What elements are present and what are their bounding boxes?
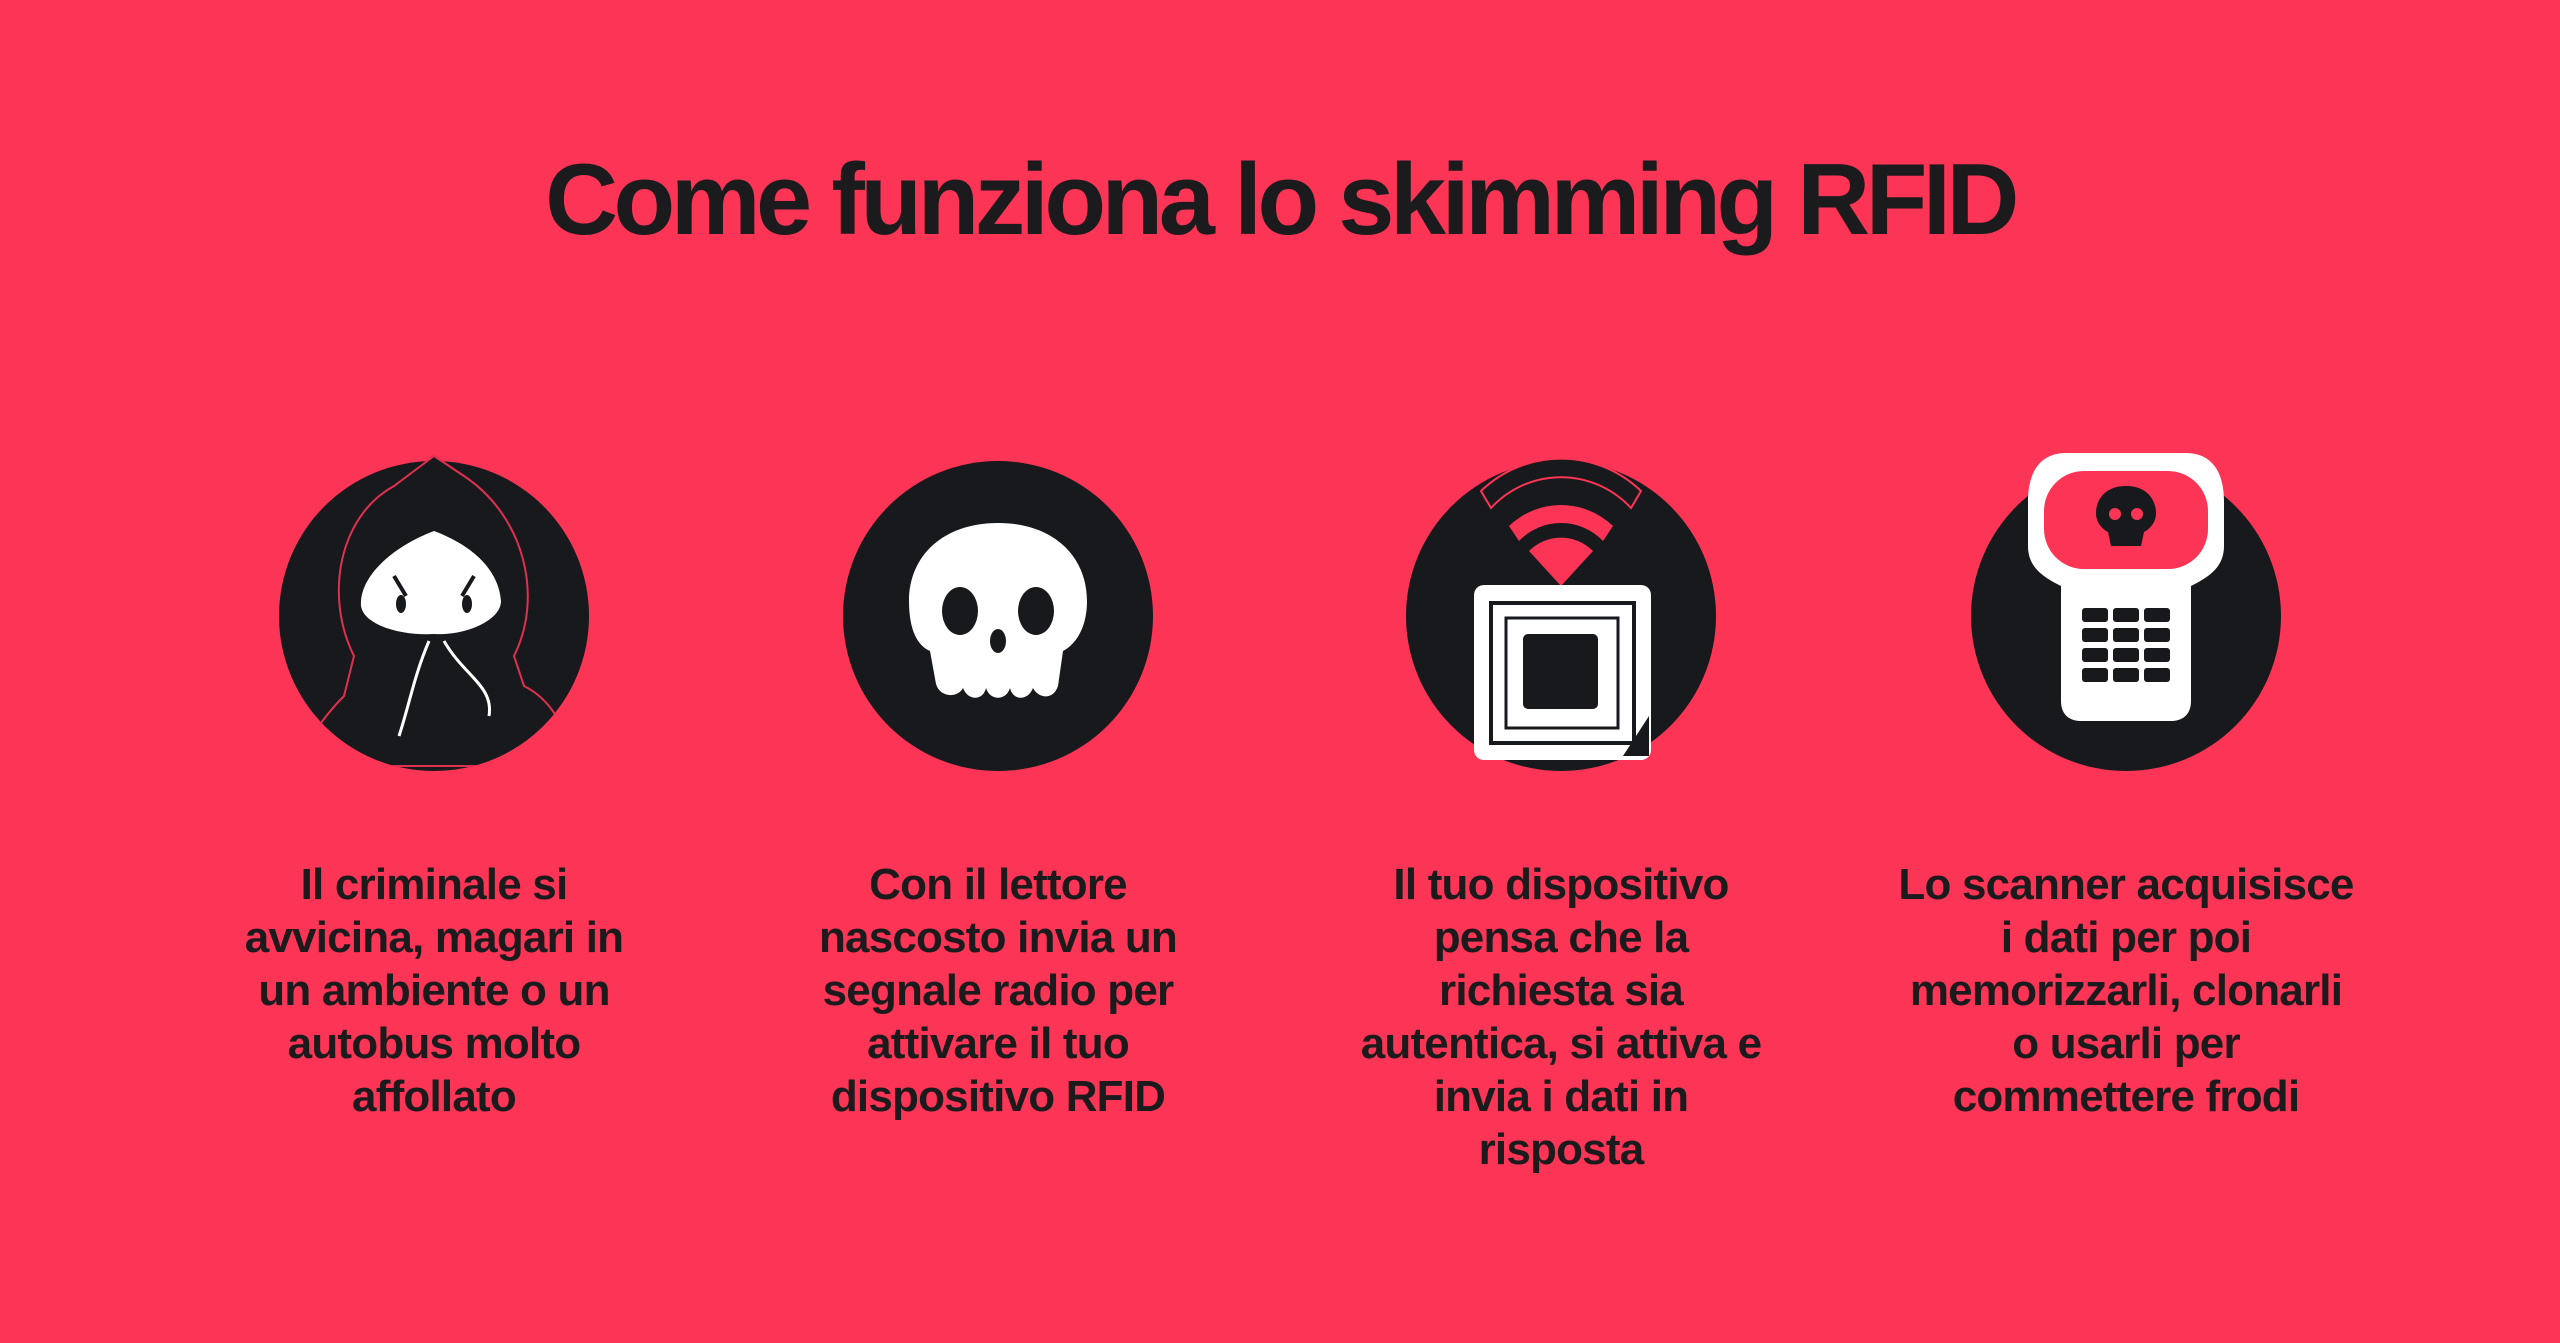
text: step 4: o usarli per xyxy=(2012,1019,2240,1068)
text: step 3: invia i dati in xyxy=(1434,1072,1688,1121)
text: step 1: affollato xyxy=(352,1072,516,1121)
text: step 4: Lo scanner acquisisce xyxy=(1898,860,2354,909)
text: step 1: autobus molto xyxy=(288,1019,580,1068)
text: step 2 xyxy=(819,860,1177,1121)
icon: hooded criminal xyxy=(279,456,589,771)
text: step 3: risposta xyxy=(1479,1125,1643,1174)
text: step 4: commettere frodi xyxy=(1953,1072,2299,1121)
text: step 3: autentica, si attiva e xyxy=(1361,1019,1761,1068)
text: step 4: memorizzarli, clonarli xyxy=(1910,966,2342,1015)
text: step 2: nascosto invia un xyxy=(819,913,1177,962)
text: step 4: i dati per poi xyxy=(2001,913,2251,962)
text: step 2: dispositivo RFID xyxy=(831,1072,1165,1121)
text: step 3: Il tuo dispositivo xyxy=(1393,860,1729,909)
text: step 2: Con il lettore xyxy=(869,860,1127,909)
text: step 1: un ambiente o un xyxy=(258,966,610,1015)
text: step 1: avvicina, magari in xyxy=(245,913,623,962)
text: step 2: segnale radio per xyxy=(823,966,1173,1015)
icon: skull xyxy=(843,461,1153,771)
text: step 2: attivare il tuo xyxy=(867,1019,1129,1068)
text: step 3: richiesta sia xyxy=(1439,966,1683,1015)
text: step 1: Il criminale si xyxy=(301,860,567,909)
text: step 1 xyxy=(245,860,623,1121)
icon: scanner device xyxy=(1971,453,2281,771)
icon: rfid card with signal xyxy=(1406,459,1716,771)
text: step 3 xyxy=(1361,860,1761,1174)
text: step 3: pensa che la xyxy=(1434,913,1688,962)
text: step 4 xyxy=(1898,860,2354,1121)
title: Come funziona lo skimming RFID xyxy=(545,144,2015,256)
